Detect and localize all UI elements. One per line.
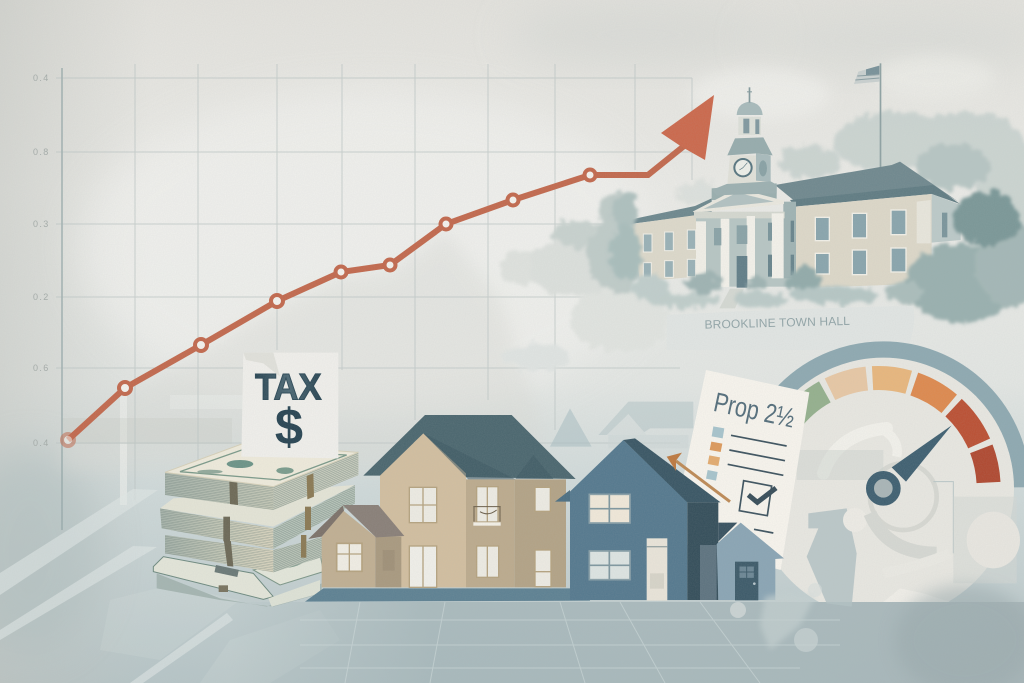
top bundle <box>165 444 358 510</box>
steps <box>719 289 744 308</box>
background trees <box>677 112 1024 240</box>
chart area ghost shading <box>62 232 540 505</box>
checklist <box>706 426 787 533</box>
Prop 2½ document <box>670 370 809 570</box>
town hall banner <box>667 306 914 350</box>
left wing windows <box>643 230 696 278</box>
right wing windows <box>815 210 906 275</box>
second bundle <box>160 485 355 549</box>
faded trees left of hall <box>500 192 670 370</box>
data points <box>62 170 596 446</box>
stack of cash and tax note <box>153 353 358 607</box>
y-axis labels: 0.8 <box>33 147 50 157</box>
flagpole and flag <box>854 63 881 170</box>
outer ring <box>745 350 1022 627</box>
front trees and shrubs <box>608 191 1024 323</box>
y-axis labels: 0.2 <box>33 292 50 302</box>
chart grid and axis <box>56 64 692 530</box>
orange arrow <box>667 453 730 502</box>
document title: Prop 2½ <box>711 386 798 434</box>
town hall banner: BROOKLINE TOWN HALL <box>704 314 851 332</box>
y-axis labels: 0.3 <box>33 219 50 229</box>
clock tower <box>712 87 777 195</box>
blue house with small annex <box>555 438 784 601</box>
colored gauge segments <box>722 332 1024 644</box>
y-axis labels: 0.4 <box>33 73 50 83</box>
checkbox <box>739 481 776 516</box>
third bundle <box>165 535 323 572</box>
small annex <box>700 523 784 600</box>
small side wing <box>308 505 404 587</box>
gauge dial face <box>780 358 1014 602</box>
house walls <box>380 433 466 587</box>
ghost swirl shapes on dial <box>797 428 1020 607</box>
dark roof <box>623 438 721 502</box>
y-axis labels: 0.6 <box>33 363 50 373</box>
bottom-right ghost blobs <box>730 583 1024 683</box>
town hall scene <box>608 63 1024 350</box>
gauge needle <box>870 425 952 502</box>
main wall <box>570 440 687 600</box>
main roof <box>363 415 576 479</box>
blue house door <box>647 538 667 601</box>
tax note: TAX <box>255 365 322 407</box>
ghost houses behind <box>550 402 693 448</box>
right wing of hall <box>775 162 961 288</box>
left wing of hall <box>628 198 712 282</box>
y-axis labels: 0.4 <box>33 438 50 448</box>
foundation strip <box>305 588 590 602</box>
tan two-story house <box>305 415 590 602</box>
rising red trend line <box>62 95 714 446</box>
portico with columns <box>693 183 796 288</box>
balcony <box>473 507 501 526</box>
tax note <box>241 353 338 458</box>
tax note: $ <box>275 398 303 455</box>
lower-left ground pattern <box>0 489 340 683</box>
arrowhead <box>661 95 714 160</box>
loose bills <box>153 553 323 607</box>
property tax gauge <box>778 341 1024 602</box>
tan house windows <box>409 487 551 587</box>
y-axis labels <box>33 73 50 448</box>
pavement <box>230 602 1024 683</box>
blue house windows <box>589 494 630 580</box>
